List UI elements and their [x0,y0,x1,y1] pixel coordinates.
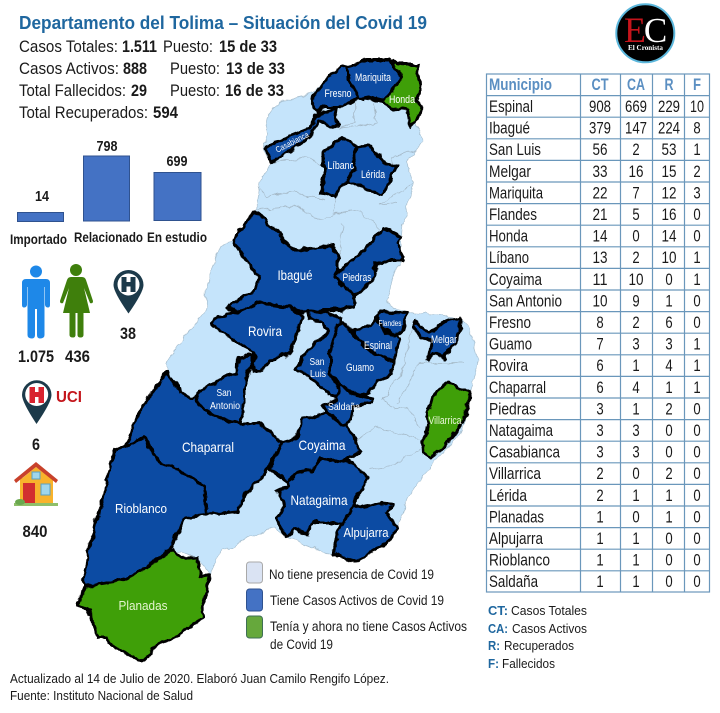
row: Alpujarra: Alpujarra [489,529,543,548]
table abbreviations key: F: [488,656,499,671]
municipality: Casabianca: Casabianca [274,129,311,155]
summary statistics: Total Recuperados: [19,103,148,122]
icon: woman [60,264,93,338]
source note [10,671,389,703]
row: Mariquita: Mariquita [489,183,543,202]
row: Melgar: 33 [592,162,608,181]
municipality: Lérida [348,145,398,193]
bar chart: origin of cases: 699 [166,153,188,170]
summary statistics: Puesto: [170,59,220,78]
municipality: Flandes [375,312,407,337]
row: Espinal: 10 [690,97,704,116]
municipality: Planadas: Planadas [118,598,168,613]
row: Mariquita [489,183,701,202]
row: Honda [489,227,701,246]
map legend: No tiene presencia de Covid 19 [269,567,434,582]
row: Ibagué: 379 [589,119,611,138]
row: Espinal [489,97,704,116]
municipality: Saldaña [323,383,373,427]
municipality: Fresno [312,65,360,112]
table header: CA [627,75,645,94]
row: San Luis: 53 [662,140,676,159]
map legend [246,562,467,652]
row: Líbano: 1 [693,248,701,267]
row: Mariquita: 7 [632,183,640,202]
row: Chaparral: 1 [665,378,673,397]
row: San Antonio: 0 [693,291,701,310]
municipality: Líbano: Líbano [328,160,354,172]
row: Natagaima: 0 [665,421,673,440]
municipality: Honda: Honda [389,94,416,106]
municipality: Mariquita [348,60,402,100]
row: Villarrica: Villarrica [489,464,541,483]
bar chart: origin of cases: En estudio [147,230,207,245]
row: Casabianca: 0 [693,443,701,462]
row: Líbano: 10 [662,248,676,267]
row: Saldaña: 0 [693,572,701,591]
icon: house with count 840 [14,462,58,541]
row: Ibagué: 147 [625,119,647,138]
municipality: Melgar: Melgar [431,334,457,346]
municipality: Rioblanco: Rioblanco [115,501,167,516]
row: Flandes: 0 [693,205,701,224]
row: Fresno: Fresno [489,313,531,332]
municipality: Lérida: Lérida [361,169,386,181]
row: San Luis: 1 [693,140,701,159]
municipality: Piedras [335,228,403,295]
men and women counts [18,347,90,366]
summary statistics: 16 de 33 [225,81,284,100]
row: Lérida: 1 [632,486,640,505]
summary statistics: 13 de 33 [226,59,285,78]
row: Casabianca: 3 [596,443,604,462]
municipality: Rovira [212,303,303,372]
row: Villarrica: 2 [665,464,673,483]
municipality: Guamo [330,322,393,395]
map legend: Tenía y ahora no tiene Casos Activos [270,619,467,634]
row: Planadas: Planadas [489,507,544,526]
row: Chaparral: 4 [632,378,640,397]
table: cases by municipality [486,74,710,592]
row: Honda: 14 [592,227,608,246]
row: Fresno [489,313,701,332]
row: Villarrica: 0 [632,464,640,483]
municipality: Chaparral: Chaparral [182,439,234,455]
row: Piedras: 0 [693,399,701,418]
municipality: Villarrica [422,383,470,458]
municipality: Melgar [412,317,460,360]
summary statistics: 15 de 33 [219,37,277,56]
row: Rioblanco: Rioblanco [489,551,550,570]
source note: Fuente: Instituto Nacional de Salud [10,688,193,703]
logo: El Cronista: El Cronista [628,44,664,52]
bar chart: origin of cases [10,138,207,247]
row: Natagaima: 3 [596,421,604,440]
row: Guamo [489,335,701,354]
row: Líbano [489,248,701,267]
row: Lérida: 0 [693,486,701,505]
icon: UCI pin: 6 [32,435,40,454]
row: Saldaña [489,572,701,591]
row: Piedras: Piedras [489,399,536,418]
table abbreviations key [488,603,587,671]
row: Guamo: 3 [665,335,673,354]
table abbreviations key: CT: [488,603,508,618]
row: Saldaña: 1 [632,572,640,591]
summary statistics: Puesto: [170,81,220,100]
municipality: Espinal: Espinal [364,340,392,352]
row: Melgar [489,162,701,181]
row: Coyaima: 0 [665,270,673,289]
row: Chaparral: 6 [596,378,604,397]
source note: Actualizado al 14 de Julio de 2020. Elaboró Juan Camilo Rengifo López. [10,671,389,686]
row: Espinal: 229 [658,97,680,116]
row: Ibagué [489,119,701,138]
row: Piedras: 3 [596,399,604,418]
row: Villarrica: 2 [596,464,604,483]
row: Mariquita: 12 [662,183,676,202]
row: Casabianca: Casabianca [489,443,560,462]
municipality: Natagaima: Natagaima [290,492,348,508]
municipality: Líbano [322,137,357,197]
table header: R [664,75,674,94]
summary statistics [19,37,285,122]
row: Melgar: 16 [628,162,644,181]
row: San Luis: 56 [592,140,608,159]
row: Mariquita: 3 [693,183,701,202]
table header: Municipio [489,75,552,94]
row: Ibagué: 8 [693,119,701,138]
municipality: Casabianca [265,108,338,163]
row: Rovira [489,356,701,375]
table header: F [693,75,701,94]
row: Lérida: 2 [596,486,604,505]
row: Guamo: 3 [632,335,640,354]
municipality: Mariquita: Mariquita [355,72,392,84]
municipality: San Antonio: Antonio [210,400,240,412]
row: Ibagué: 224 [658,119,680,138]
row: Espinal: 669 [625,97,647,116]
row: Guamo: Guamo [489,335,532,354]
table abbreviations key: Casos Activos [512,621,587,636]
row: San Antonio: San Antonio [489,291,562,310]
bar chart: origin of cases: Importado [10,232,67,247]
row: Coyaima: 11 [592,270,608,289]
row: Lérida [489,486,701,505]
row: Melgar: Melgar [489,162,531,181]
row: Guamo: 7 [596,335,604,354]
summary statistics: Casos Activos: [19,59,119,78]
row: San Luis [489,140,701,159]
municipality: Natagaima [276,458,368,537]
icon: man [22,266,50,338]
municipality: Rioblanco [82,438,208,587]
row: Saldaña: Saldaña [489,572,538,591]
row: Villarrica [489,464,701,483]
row: Flandes: 21 [592,205,608,224]
row: Flandes [489,205,701,224]
table abbreviations key: Recuperados [504,638,574,653]
icon: UCI pin [22,380,82,454]
municipality: San Antonio: San [216,387,232,399]
table header: CT [592,75,609,94]
row: Melgar: 2 [693,162,701,181]
row: Alpujarra: 0 [693,529,701,548]
row: Espinal: 908 [589,97,611,116]
municipality: Alpujarra [333,503,397,562]
row: Piedras [489,399,701,418]
row: Chaparral: Chaparral [489,378,546,397]
municipality: Rovira: Rovira [248,323,282,339]
summary statistics: 594 [153,103,178,122]
row: Guamo: 1 [693,335,701,354]
row: Flandes: 16 [662,205,676,224]
municipality: San Luis: Luis [310,368,326,380]
row: Rioblanco [489,551,701,570]
row: Honda: Honda [489,227,528,246]
icon: hospital pin with count 38 [114,270,144,343]
icon: hospital pin with count 38: 38 [120,324,136,343]
table abbreviations key: CA: [488,621,508,636]
row: Fresno: 8 [596,313,604,332]
row: Planadas: 0 [632,507,640,526]
row: Coyaima: 10 [628,270,644,289]
icon: UCI pin: UCI [56,389,82,406]
row: Fresno: 0 [693,313,701,332]
municipality: Ibagué [227,212,355,313]
row: Rioblanco: 0 [665,551,673,570]
row: Natagaima: Natagaima [489,421,553,440]
logo: El Cronista: E [624,10,646,50]
row: Rovira: 4 [665,356,673,375]
row: Rovira: Rovira [489,356,528,375]
row: Planadas: 1 [665,507,673,526]
row: Mariquita: 22 [592,183,608,202]
row: Alpujarra [489,529,701,548]
table abbreviations key: Fallecidos [502,656,555,671]
row: San Antonio: 1 [665,291,673,310]
map legend: Tiene Casos Activos de Covid 19 [270,593,444,608]
row: Espinal: Espinal [489,97,533,116]
table abbreviations key: Casos Totales [511,603,587,618]
row: Rovira: 1 [693,356,701,375]
row: Planadas: 0 [693,507,701,526]
table abbreviations key: R: [488,638,500,653]
row: Villarrica: 0 [693,464,701,483]
row: Piedras: 1 [632,399,640,418]
map base: municipalities without Covid 19 [167,65,478,575]
municipality: San Luis: San [310,356,325,368]
municipality: Villarrica: Villarrica [428,415,462,427]
summary statistics: 29 [131,81,147,100]
summary statistics: 888 [123,59,147,78]
row: Saldaña: 0 [665,572,673,591]
row: Ibagué: Ibagué [489,119,530,138]
bar chart: origin of cases: Relacionado [74,230,143,245]
row: Flandes: Flandes [489,205,537,224]
row: Rioblanco: 0 [693,551,701,570]
municipality: Coyaima: Coyaima [298,437,346,453]
icon: house with count 840: 840 [22,522,48,541]
row: San Luis: 2 [632,140,640,159]
municipality: Saldaña: Saldaña [328,401,360,413]
row: Coyaima [489,270,701,289]
row: Rovira: 1 [632,356,640,375]
municipality: Coyaima [270,412,360,482]
bar chart: origin of cases: 798 [96,138,118,155]
row: Lérida: 1 [665,486,673,505]
map legend: de Covid 19 [270,637,333,652]
row: San Antonio: 9 [632,291,640,310]
row: Honda: 0 [632,227,640,246]
row: Alpujarra: 1 [596,529,604,548]
municipality: San Luis [297,310,340,397]
row: Rioblanco: 1 [632,551,640,570]
municipality: Honda [382,60,422,127]
municipality: Guamo: Guamo [346,362,374,374]
row: Honda: 14 [662,227,676,246]
row: San Luis: San Luis [489,140,541,159]
summary statistics: Total Fallecidos: [19,81,126,100]
row: Alpujarra: 1 [632,529,640,548]
row: Natagaima: 3 [632,421,640,440]
row: Planadas [489,507,701,526]
row: Piedras: 2 [665,399,673,418]
municipality: Alpujarra: Alpujarra [344,525,389,540]
municipality: San Antonio [195,355,252,423]
municipality: Piedras: Piedras [342,272,372,284]
municipality: Espinal [353,318,400,360]
men and women counts: 1.075 [18,347,54,366]
row: Fresno: 6 [665,313,673,332]
municipality: Flandes: Flandes [378,319,402,328]
row: Líbano: 2 [632,248,640,267]
municipality: Chaparral [125,372,282,515]
row: Coyaima: 1 [693,270,701,289]
row: San Antonio [489,291,701,310]
row: Fresno: 2 [632,313,640,332]
row: Natagaima [489,421,701,440]
row: Alpujarra: 0 [665,529,673,548]
row: Lérida: Lérida [489,486,527,505]
row: Coyaima: Coyaima [489,270,542,289]
logo: El Cronista [616,4,674,62]
row: Planadas: 1 [596,507,604,526]
row: Rioblanco: 1 [596,551,604,570]
row: Honda: 0 [693,227,701,246]
table header [489,75,701,94]
row: Líbano: 13 [592,248,608,267]
bar chart: origin of cases: 14 [35,188,50,205]
row: Casabianca: 0 [665,443,673,462]
row: San Antonio: 10 [592,291,608,310]
municipality: Planadas [77,550,210,662]
logo: El Cronista: C [644,11,667,50]
row: Chaparral: 1 [693,378,701,397]
municipality: Fresno: Fresno [324,88,352,100]
summary statistics: Casos Totales: [19,37,118,56]
row: Natagaima: 0 [693,421,701,440]
summary statistics: 1.511 [122,37,157,56]
title: Departamento del Tolima – Situación del Covid 19 [19,12,427,33]
row: Melgar: 15 [662,162,676,181]
row: Líbano: Líbano [489,248,529,267]
row: Chaparral [489,378,701,397]
row: Flandes: 5 [632,205,640,224]
men and women counts: 436 [65,347,90,366]
map of Tolima [77,60,478,662]
municipality: Ibagué: Ibagué [278,267,313,283]
summary statistics: Puesto: [163,37,213,56]
row: Rovira: 6 [596,356,604,375]
row: Casabianca [489,443,701,462]
row: Saldaña: 1 [596,572,604,591]
row: Casabianca: 3 [632,443,640,462]
